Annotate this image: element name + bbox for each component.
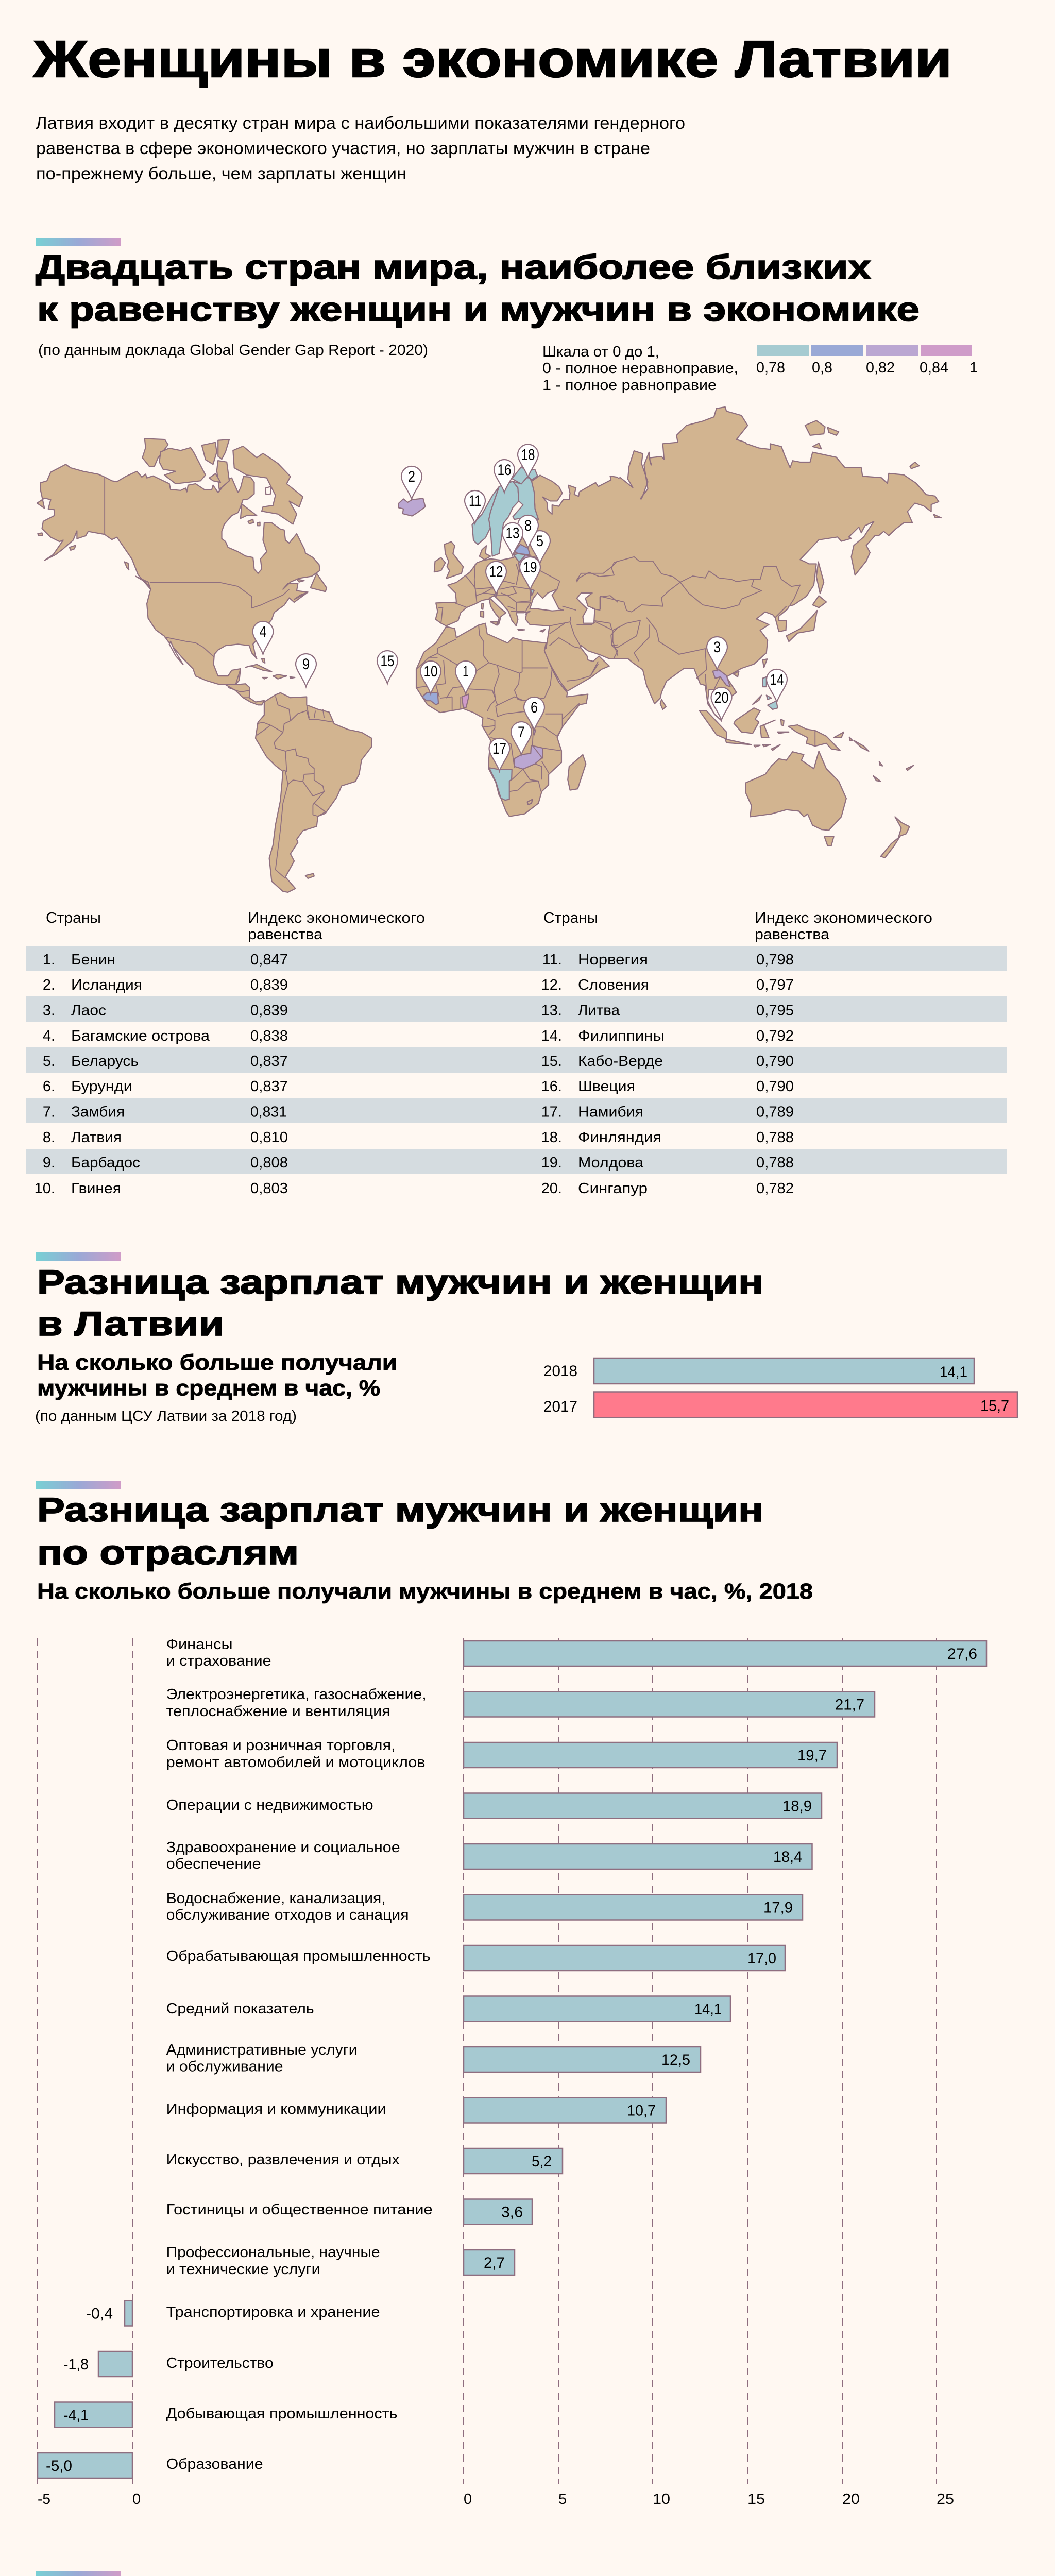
row: education: -5,0 <box>46 2458 72 2475</box>
pin 17 <box>489 738 510 771</box>
table right column values: 0,782 <box>756 1180 794 1197</box>
legend: scale: 0,8 <box>812 360 832 376</box>
pin 20: 20 <box>714 689 728 706</box>
source note 2: (по данным ЦСУ Латвии за 2018 год) <box>35 1408 297 1425</box>
legend: scale: 0,84 <box>920 360 948 376</box>
heading: by sector <box>37 1490 763 1571</box>
axis labels: 20 <box>842 2491 860 2507</box>
pin 10 <box>420 661 441 694</box>
row: average <box>166 1996 730 2022</box>
row: health: 18,4 <box>773 1849 802 1866</box>
table left column values: 0,831 <box>250 1104 287 1120</box>
map: Americas <box>37 438 371 892</box>
bar chart: Latvia 2018 vs 2017 <box>543 1358 1017 1418</box>
table left column values: 0,839 <box>250 1003 288 1019</box>
row: energy: 21,7 <box>835 1696 864 1714</box>
pin 7 <box>511 722 532 755</box>
table left column values: 0,847 <box>250 952 288 968</box>
axis labels: 15 <box>747 2491 765 2507</box>
row: health: обеспечение <box>166 1856 261 1872</box>
pin 17: 17 <box>492 740 506 757</box>
pin 3 <box>707 637 727 670</box>
bar 2017 <box>543 1392 1017 1418</box>
table left column names: Латвия <box>71 1129 122 1146</box>
bar chart: by sector <box>38 1636 986 2507</box>
section marker: gradient bar 1 <box>36 238 121 246</box>
pin 7: 7 <box>518 724 525 741</box>
axis labels: 0 <box>464 2491 472 2507</box>
row: arts: 5,2 <box>532 2153 552 2170</box>
table left column names: Барбадос <box>71 1155 140 1171</box>
table right column names <box>578 952 665 1197</box>
row: finance: 27,6 <box>947 1646 977 1663</box>
table left column values: 0,839 <box>250 977 288 993</box>
legend: scale: 0,78 <box>756 360 785 376</box>
row: trade <box>166 1737 837 1771</box>
row: real estate: 18,9 <box>782 1798 812 1815</box>
pin 3: 3 <box>713 639 721 656</box>
pin 13 <box>502 523 523 556</box>
table row bands <box>26 946 1007 1174</box>
legend: scale: Шкала от 0 до 1, <box>542 344 659 360</box>
row: administrative: и обслуживание <box>166 2059 283 2075</box>
pin 10: 10 <box>423 663 438 680</box>
row: finance: Финансы <box>166 1636 233 1653</box>
table left column values: 0,837 <box>250 1053 288 1070</box>
row: real estate: Операции с недвижимостью <box>166 1797 373 1814</box>
row: trade: Оптовая и розничная торговля, <box>166 1737 396 1754</box>
row: water: Водоснабжение, канализация, <box>166 1890 386 1907</box>
heading: by sector: Разница зарплат мужчин и женщин <box>37 1490 763 1529</box>
pin 15 <box>377 651 398 684</box>
row: finance <box>166 1636 986 1669</box>
map: Europe, Africa and western Asia <box>398 467 648 817</box>
row: IT: Информация и коммуникации <box>166 2101 386 2117</box>
row: administrative: 12,5 <box>661 2052 690 2069</box>
pin 6 <box>524 697 544 730</box>
title: Женщины в экономике Латвии <box>33 30 952 88</box>
row: transport <box>86 2301 380 2326</box>
pin 20 <box>711 687 731 720</box>
subheading: wage gap in Latvia: На сколько больше получали <box>37 1350 397 1375</box>
pin 1 <box>455 661 476 694</box>
table right column names: Сингапур <box>578 1180 648 1197</box>
row: transport: -0,4 <box>86 2305 113 2323</box>
table right column values: 0,790 <box>756 1053 794 1070</box>
table left column names: Исландия <box>71 977 142 993</box>
pin 9 <box>296 654 316 687</box>
row: finance: и страхование <box>166 1653 271 1669</box>
map: Asia and Oceania <box>576 407 941 858</box>
row: trade: ремонт автомобилей и мотоциклов <box>166 1754 426 1771</box>
row: average: Средний показатель <box>166 2001 314 2017</box>
intro text: равенства в сфере экономического участия, но зарплаты мужчин в стране <box>36 139 650 158</box>
table left column ranks: 2. <box>43 977 55 993</box>
table right column ranks <box>541 952 562 1197</box>
pin 16: 16 <box>498 462 511 479</box>
pin 19 <box>520 557 540 590</box>
table left column ranks: 1. <box>43 952 55 968</box>
table header: Индекс экономического <box>248 910 425 926</box>
row: construction <box>63 2351 274 2377</box>
table left column names: Гвинея <box>71 1180 121 1197</box>
table right column values <box>756 952 794 1197</box>
table right column names: Литва <box>578 1003 620 1019</box>
subheading: wage gap in Latvia <box>37 1350 397 1400</box>
row: arts: Искусство, развлечения и отдых <box>166 2151 400 2168</box>
row: energy: Электроэнергетика, газоснабжение, <box>166 1686 427 1703</box>
table left column values: 0,837 <box>250 1078 288 1095</box>
table left column ranks: 3. <box>43 1003 55 1019</box>
row: water <box>166 1890 803 1923</box>
row: mining <box>55 2402 398 2428</box>
table left column values: 0,808 <box>250 1155 288 1171</box>
pin 18 <box>518 444 538 477</box>
heading: twenty countries: Двадцать стран мира, наиболее близких <box>36 248 871 286</box>
row: administrative: Административные услуги <box>166 2042 358 2058</box>
row: water: обслуживание отходов и санация <box>166 1907 409 1923</box>
row: trade: 19,7 <box>797 1747 827 1764</box>
table left column values <box>250 952 288 1197</box>
table: country index <box>26 910 1007 1197</box>
row: energy: теплоснабжение и вентиляция <box>166 1703 390 1720</box>
heading: twenty countries <box>36 248 920 328</box>
table right column ranks: 11. <box>542 952 562 968</box>
table right column names: Норвегия <box>578 952 648 968</box>
table left column ranks: 6. <box>43 1078 55 1095</box>
table right column values: 0,792 <box>756 1028 794 1044</box>
table right column values: 0,788 <box>756 1155 794 1171</box>
pin 18: 18 <box>521 446 535 464</box>
axis labels <box>38 2491 954 2507</box>
pin 13: 13 <box>506 525 519 542</box>
pin 11 <box>465 490 485 523</box>
table right column names: Словения <box>578 977 649 993</box>
intro text: по-прежнему больше, чем зарплаты женщин <box>36 164 406 183</box>
table right column values: 0,789 <box>756 1104 794 1120</box>
table left column ranks: 9. <box>43 1155 55 1171</box>
heading: wage gap in Latvia: Разница зарплат мужчин и женщин <box>37 1263 763 1301</box>
legend: scale: 1 - полное равноправие <box>542 377 717 394</box>
source note: (по данным доклада Global Gender Gap Report - 2020) <box>38 342 428 359</box>
table right column ranks: 13. <box>541 1003 562 1019</box>
pin 14 <box>767 669 787 702</box>
axis labels: 10 <box>653 2491 670 2507</box>
table left column names: Бенин <box>71 952 115 968</box>
row: health <box>166 1839 812 1872</box>
table right column names: Финляндия <box>578 1129 661 1146</box>
pin 8: 8 <box>524 517 532 534</box>
row: manufacturing: Обрабатывающая промышленность <box>166 1948 431 1964</box>
table header <box>46 910 932 943</box>
pin 1: 1 <box>463 663 469 680</box>
axis labels: 0 <box>132 2491 141 2507</box>
row: health: Здравоохранение и социальное <box>166 1839 400 1856</box>
row: average: 14,1 <box>694 2001 722 2018</box>
row: professional: Профессиональные, научные <box>166 2244 380 2261</box>
row: education <box>38 2453 263 2478</box>
pin 12 <box>486 562 506 595</box>
table right column values: 0,795 <box>756 1003 794 1019</box>
table right column ranks: 14. <box>541 1028 562 1044</box>
table right column values: 0,798 <box>756 952 794 968</box>
table right column ranks: 12. <box>541 977 562 993</box>
pin 6: 6 <box>531 699 538 716</box>
table right column names: Намибия <box>578 1104 643 1120</box>
table header: равенства <box>755 926 830 943</box>
row: IT <box>166 2098 666 2123</box>
pin 2 <box>401 466 422 499</box>
row: energy <box>166 1686 875 1720</box>
table left column names: Беларусь <box>71 1053 139 1070</box>
world map <box>37 407 941 892</box>
table right column ranks: 18. <box>541 1129 562 1146</box>
table left column names <box>71 952 210 1197</box>
heading: wage gap in Latvia: в Латвии <box>37 1304 224 1343</box>
table left column values: 0,838 <box>250 1028 288 1044</box>
table right column names: Швеция <box>578 1078 635 1095</box>
table left column ranks <box>35 952 55 1197</box>
pin 15: 15 <box>380 653 395 670</box>
heading: by sector: по отраслям <box>37 1533 299 1571</box>
table left column ranks: 10. <box>35 1180 55 1197</box>
table left column values: 0,810 <box>250 1129 288 1146</box>
row: professional: и технические услуги <box>166 2261 320 2278</box>
row: mining: -4,1 <box>63 2407 89 2424</box>
pin 19: 19 <box>523 559 537 576</box>
intro text <box>36 113 685 183</box>
row: professional <box>166 2244 515 2278</box>
table right column ranks: 17. <box>541 1104 562 1120</box>
pin 8 <box>518 515 538 548</box>
pin 4 <box>252 621 273 654</box>
table right column ranks: 16. <box>541 1078 562 1095</box>
heading: twenty countries: к равенству женщин и мужчин в экономике <box>37 290 920 328</box>
table left column ranks: 4. <box>43 1028 55 1044</box>
legend: scale: 0,82 <box>866 360 895 376</box>
axis labels: -5 <box>38 2491 50 2507</box>
table right column ranks: 20. <box>541 1180 562 1197</box>
row: manufacturing: 17,0 <box>747 1950 776 1967</box>
row: administrative <box>166 2042 701 2075</box>
table left column values: 0,803 <box>250 1180 288 1197</box>
bar 2017: 2017 <box>543 1398 577 1415</box>
pin 5: 5 <box>536 533 543 550</box>
pin 16 <box>494 460 515 493</box>
row: arts <box>166 2148 563 2174</box>
table right column values: 0,788 <box>756 1129 794 1146</box>
subheading: by sector: На сколько больше получали мужчины в среднем в час, %, 2018 <box>37 1579 813 1604</box>
row: professional: 2,7 <box>484 2255 505 2272</box>
axis labels: 5 <box>558 2491 567 2507</box>
row: education: Образование <box>166 2456 263 2472</box>
section marker: gradient bar 3 <box>36 1481 121 1489</box>
pin 2: 2 <box>408 468 415 485</box>
table right column values: 0,790 <box>756 1078 794 1095</box>
table left column names: Багамские острова <box>71 1028 210 1044</box>
heading: wage gap in Latvia <box>37 1263 763 1343</box>
row: hospitality <box>166 2199 532 2225</box>
row: IT: 10,7 <box>627 2102 656 2120</box>
table header: Страны <box>543 910 598 926</box>
table right column names: Филиппины <box>578 1028 665 1044</box>
pin 14: 14 <box>770 671 784 688</box>
legend: scale: 0 - полное неравноправие, <box>542 360 738 377</box>
row: transport: Транспортировка и хранение <box>166 2304 380 2320</box>
subheading: wage gap in Latvia: мужчины в среднем в час, % <box>37 1376 380 1400</box>
legend: scale: 1 <box>969 360 978 376</box>
pin 5 <box>530 531 550 564</box>
table left column ranks: 5. <box>43 1053 55 1070</box>
section marker: gradient bar 2 <box>36 1252 121 1261</box>
axis labels: 25 <box>937 2491 954 2507</box>
bar 2018: 14,1 <box>940 1364 967 1381</box>
pin 9: 9 <box>302 656 310 673</box>
table left column names: Лаос <box>71 1003 106 1019</box>
table right column names: Кабо-Верде <box>578 1053 663 1070</box>
table right column names: Молдова <box>578 1155 644 1171</box>
table left column names: Замбия <box>71 1104 125 1120</box>
pin 11: 11 <box>469 493 481 510</box>
row: manufacturing <box>166 1945 785 1971</box>
row: mining: Добывающая промышленность <box>166 2405 398 2422</box>
bar 2017: 15,7 <box>980 1397 1009 1415</box>
table header: Страны <box>46 910 101 926</box>
section marker: gradient bar 4 <box>36 2571 121 2576</box>
row: construction: -1,8 <box>63 2356 89 2373</box>
intro text: Латвия входит в десятку стран мира с наибольшими показателями гендерного <box>36 113 685 132</box>
table left column ranks: 8. <box>43 1129 55 1146</box>
bar 2018: 2018 <box>543 1363 577 1380</box>
legend: scale <box>542 344 978 394</box>
row: construction: Строительство <box>166 2355 274 2371</box>
row: water: 17,9 <box>763 1899 793 1917</box>
bar 2018 <box>543 1358 974 1384</box>
table left column names: Бурунди <box>71 1078 132 1095</box>
row: hospitality: Гостиницы и общественное питание <box>166 2201 433 2218</box>
pin 12: 12 <box>489 564 503 581</box>
table header: равенства <box>248 926 323 943</box>
row: real estate <box>166 1793 822 1819</box>
table left column ranks: 7. <box>43 1104 55 1120</box>
table header: Индекс экономического <box>755 910 932 926</box>
table right column ranks: 19. <box>541 1155 562 1171</box>
row: hospitality: 3,6 <box>501 2204 523 2221</box>
pin 4: 4 <box>260 623 267 640</box>
table right column ranks: 15. <box>541 1053 562 1070</box>
table right column values: 0,797 <box>756 977 794 993</box>
